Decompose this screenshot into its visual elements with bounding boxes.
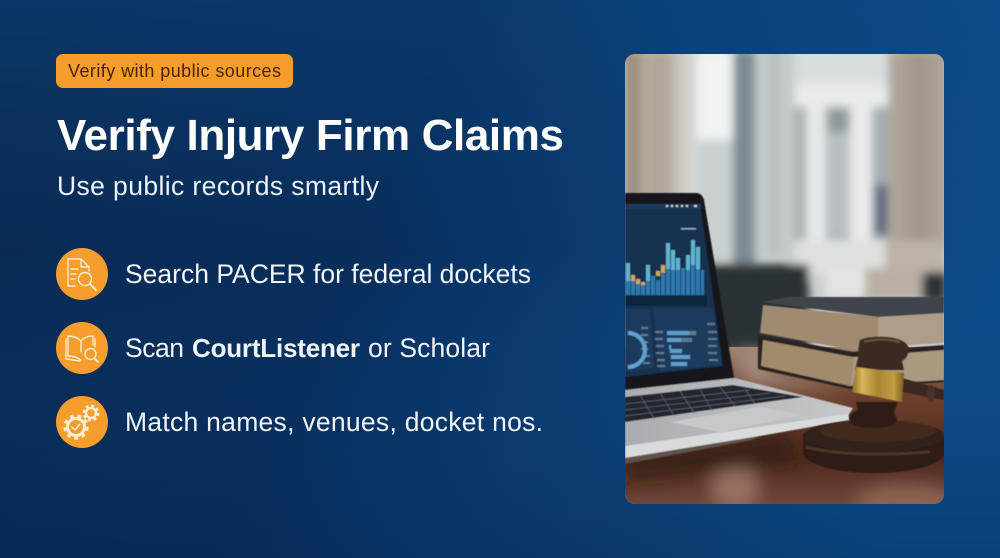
label: Scan CourtListener or Scholar: or Scholar — [368, 333, 490, 363]
icon: open book with magnifier — [56, 322, 108, 374]
label: Scan CourtListener or Scholar: CourtListener — [192, 333, 360, 363]
icon: document with magnifier — [56, 248, 108, 300]
laptop screen — [625, 204, 723, 377]
sound block — [802, 452, 944, 474]
gavel — [803, 337, 945, 473]
label: Match names, venues, docket nos.: Match names, venues, docket nos. — [125, 407, 543, 437]
photo: laptop, law books and gavel in front of courthouse columns — [625, 50, 955, 516]
icon: gears with check — [56, 396, 108, 448]
keyboard deck — [625, 378, 853, 448]
laptop — [625, 193, 853, 464]
label: Scan CourtListener or Scholar: Scan — [125, 333, 184, 363]
list item: Match names — [56, 396, 543, 448]
handle — [902, 378, 944, 400]
label: Scan CourtListener or Scholar — [125, 333, 490, 363]
brass band — [852, 367, 904, 402]
touchpad — [672, 408, 792, 432]
stacked law books — [758, 297, 944, 389]
badge: Verify with public sources — [56, 54, 293, 88]
screen panels — [625, 309, 654, 372]
badge: Verify with public sources: Verify with public sources — [68, 61, 281, 81]
laptop lid — [625, 193, 734, 392]
blurred courthouse background — [625, 50, 950, 354]
table — [625, 347, 944, 507]
title: Verify Injury Firm Claims — [57, 111, 564, 160]
subtitle: Use public records smartly — [57, 171, 380, 201]
donut — [628, 333, 645, 367]
screen bar chart — [626, 240, 704, 295]
screen list bars — [667, 331, 690, 366]
head lower — [849, 402, 898, 428]
label: Search PACER for federal dockets: Search PACER for federal dockets — [125, 259, 531, 289]
list item: Scan CourtListener — [56, 322, 490, 374]
list item: Search PACER — [56, 248, 531, 300]
head upper — [855, 337, 909, 370]
keyboard — [625, 385, 803, 422]
